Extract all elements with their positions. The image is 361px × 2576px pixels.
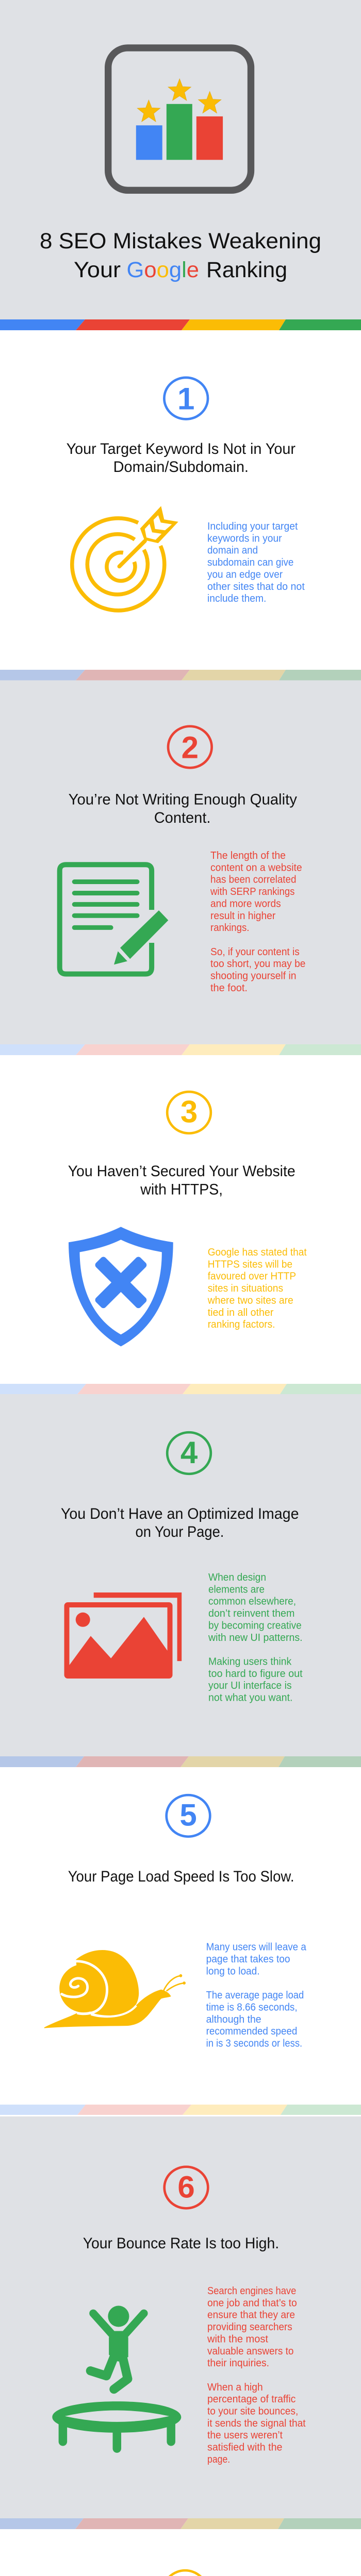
body text 6: Search engines have [207,2285,296,2297]
body text 5: long to load. [206,1965,260,1977]
number badge 4 [167,1432,211,1474]
panel: mistake 6 [0,2116,361,2518]
body text 6 [207,2285,306,2465]
body text 1: other sites that do not [207,581,305,592]
heading 4: on Your Page. [135,1523,224,1540]
body text 6: with the most [207,2333,268,2345]
icon: image frames with mountains [67,1592,182,1676]
body text 2: content on a website [210,862,302,873]
heading 3: with HTTPS, [140,1181,223,1198]
body text 6: one job and that’s to [207,2297,297,2309]
body text 2: result in higher [210,910,276,922]
body text 4: too hard to figure out [208,1668,303,1680]
heading 1: Domain/Subdomain. [113,459,249,476]
icon: rounded frame with bars and stars [108,48,251,190]
body text 1: Including your target [207,521,298,532]
heading 2: Content. [154,809,210,826]
body text 2: rankings. [210,922,249,934]
body text 6: to your site bounces, [207,2406,298,2417]
number badge 3 [167,1092,211,1133]
body text 5: Many users will leave a [206,1942,307,1953]
colour stripe: header [0,319,361,330]
body text 2: too short, you may be [210,958,305,970]
body text 4: with new UI patterns. [208,1632,303,1643]
body text 4: elements are [208,1584,265,1595]
body text 2: shooting yourself in [210,971,296,982]
body text 4 [208,1572,303,1703]
body text 5: page that takes too [206,1954,290,1965]
body text 6: the users weren’t [207,2430,283,2441]
body text 3 [207,1247,307,1330]
body text 6: page. [207,2454,230,2465]
panel: mistake 3 [0,1055,361,1384]
body text 1: keywords in your [207,533,282,544]
heading 1: Your Target Keyword Is Not in Your [67,440,296,457]
body text 1: subdomain can give [207,557,293,568]
heading 3: You Haven’t Secured Your Website [68,1163,296,1180]
body text 2: and more words [210,898,281,909]
heading 5: Your Page Load Speed Is Too Slow. [68,1868,294,1885]
body text 1 [207,521,305,604]
number badge 4: 4 [180,1435,198,1470]
panel: mistake 7 [0,2529,361,2576]
heading 2: You’re Not Writing Enough Quality [69,791,297,808]
colour stripe: section 6 [0,2518,361,2529]
body text 1: domain and [207,545,258,556]
panel: mistake 4 [0,1394,361,1756]
body text 4: don’t reinvent them [208,1608,294,1619]
icon: shield with cross [69,1227,173,1346]
icon: person jumping on trampoline [52,2306,181,2449]
number badge 3: 3 [180,1095,198,1129]
number badge 1 [164,378,208,419]
colour stripe: section 5 [0,2105,361,2116]
body text 5: in is 3 seconds or less. [206,2038,302,2049]
body text 6: percentage of traffic [207,2394,296,2405]
body text 3: HTTPS sites will be [208,1259,292,1270]
body text 2: So, if your content is [210,946,300,958]
body text 6: valuable answers to [207,2346,293,2357]
title: Ranking [206,258,287,282]
number badge 6 [165,2167,208,2208]
body text 3: tied in all other [208,1307,274,1318]
body text 4: your UI interface is [208,1680,292,1691]
body text 1: you an edge over [207,569,283,580]
number badge 2 [168,726,212,768]
body text 1: include them. [207,593,266,604]
heading 4: You Don’t Have an Optimized Image [61,1505,299,1522]
panel: mistake 2 [0,680,361,1044]
body text 5: The average page load [206,1990,304,2001]
icon: target with arrow [72,506,178,611]
body text 2: has been correlated [210,874,296,886]
body text 5 [206,1942,307,2049]
body text 3: sites in situations [208,1283,283,1294]
heading 6: Your Bounce Rate Is too High. [83,2235,279,2252]
body text 3: favoured over HTTP [208,1271,296,1282]
body text 6: their inquiries. [207,2358,269,2369]
number badge 7 [163,2570,207,2576]
title: Your [74,258,121,282]
body text 5: recommended speed [206,2026,297,2037]
body text 6: it sends the signal that [207,2418,306,2429]
heading 2 [69,791,297,826]
body text 5: although the [206,2014,261,2025]
body text 2: the foot. [210,982,248,994]
title: 8 SEO Mistakes Weakening [40,229,321,253]
body text 2: with SERP rankings [210,886,294,897]
body text 6: ensure that they are [207,2310,295,2321]
icon: snail [44,1950,186,2028]
colour stripe: section 1 [0,670,361,680]
icon: document with pencil [60,865,168,974]
body text 4: by becoming creative [208,1620,302,1631]
body text 4: not what you want. [208,1692,292,1703]
colour stripe: section 2 [0,1044,361,1055]
panel: mistake 5 [0,1767,361,2105]
heading 4 [61,1505,299,1540]
body text 3: where two sites are [207,1295,293,1306]
panel: hero header [0,0,361,319]
title [40,229,321,282]
body text 2 [210,850,305,994]
body text 4: Making users think [208,1656,292,1667]
colour stripe: section 4 [0,1756,361,1767]
body text 6: satisfied with the [207,2442,283,2453]
colour stripe: section 3 [0,1384,361,1394]
body text 3: Google has stated that [208,1247,307,1258]
number badge 6: 6 [177,2170,195,2205]
title: Google [127,258,199,282]
panel: mistake 1 [0,330,361,670]
body text 5: time is 8.66 seconds, [206,2002,298,2013]
number badge 5: 5 [179,1798,197,1832]
heading 3 [68,1163,296,1198]
number badge 5 [167,1795,210,1837]
body text 3: ranking factors. [208,1319,275,1330]
body text 4: When design [208,1572,266,1583]
heading 1 [67,440,296,476]
number badge 1: 1 [177,382,194,416]
body text 6: providing searchers [207,2321,292,2333]
body text 4: common elsewhere, [208,1596,296,1607]
body text 2: The length of the [210,850,286,861]
number badge 2: 2 [182,730,199,765]
body text 6: When a high [207,2382,263,2393]
